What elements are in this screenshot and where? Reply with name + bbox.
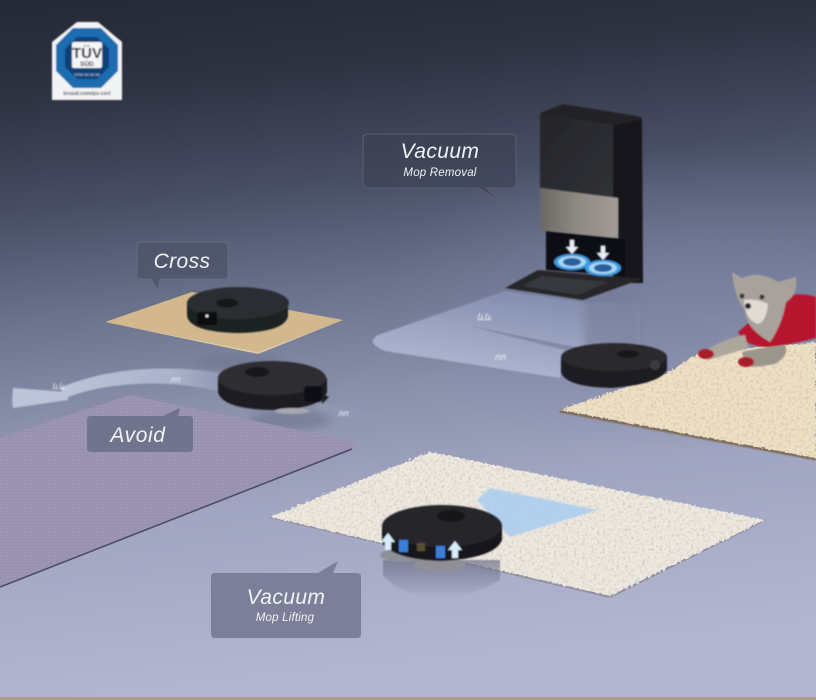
callout: Vacuum Mop Removal: Mop Removal (403, 167, 477, 179)
dog (698, 272, 816, 367)
certification badge: TÜV (72, 45, 102, 62)
certification badge: 0750 00 00 00 (74, 72, 101, 77)
robot reflection under mat (195, 354, 285, 370)
blue module left (399, 540, 408, 552)
robot: cross (187, 287, 289, 333)
callout: Vacuum Mop Lifting: Vacuum (247, 586, 325, 609)
robot reflection (383, 560, 500, 598)
floor lane under station: ոո (494, 352, 506, 362)
curved path arrow: ոո (338, 409, 349, 418)
mop pads (380, 548, 428, 562)
blue module right (436, 546, 445, 558)
callout: Vacuum Mop Removal (363, 134, 516, 200)
robot: avoid (218, 361, 329, 414)
dog head (732, 272, 796, 342)
robot: mop lifting (380, 505, 502, 572)
blue sensor beam (477, 488, 598, 537)
cardboard mat (105, 292, 343, 352)
station reflection (585, 288, 641, 350)
robot shadow on floor (250, 410, 330, 430)
dog back leg (742, 345, 786, 367)
floor lane under station (373, 291, 640, 378)
curved path arrow: ոո (170, 375, 181, 384)
blue octagon seal (56, 28, 118, 88)
certification badge: SÜD (80, 59, 94, 68)
dog sweater (738, 294, 816, 347)
station front (540, 114, 613, 198)
certification badge (52, 22, 122, 100)
station side (613, 119, 643, 283)
station top (540, 104, 642, 125)
up arrow right (448, 541, 462, 558)
base tray (505, 270, 642, 300)
white carpet (270, 452, 765, 597)
down arrow right (597, 246, 609, 260)
callout: Cross: Cross (154, 250, 211, 273)
lane tread marks: ևև (477, 312, 492, 322)
down arrow left (566, 240, 578, 254)
callout: Vacuum Mop Lifting (211, 561, 361, 638)
certification badge: bruud.com/px-cert (63, 91, 111, 97)
tread marks: ևև (52, 382, 65, 391)
callout: Cross (137, 242, 228, 290)
callout: Avoid: Avoid (108, 424, 166, 447)
curved path arrow (12, 368, 380, 424)
dog front leg (703, 335, 748, 360)
purple mat (0, 395, 355, 587)
beige shag rug (560, 342, 816, 459)
blue mop disc left (554, 254, 590, 270)
docking station (505, 104, 643, 300)
blue mop disc right (585, 260, 621, 276)
callout: Vacuum Mop Lifting: Mop Lifting (256, 612, 315, 624)
station metal band (540, 188, 618, 238)
callout: Avoid (87, 408, 193, 452)
callout: Vacuum Mop Removal: Vacuum (401, 140, 479, 163)
mop bay (546, 231, 625, 276)
up arrow left (381, 533, 395, 550)
robot: carpet approach (561, 343, 667, 388)
